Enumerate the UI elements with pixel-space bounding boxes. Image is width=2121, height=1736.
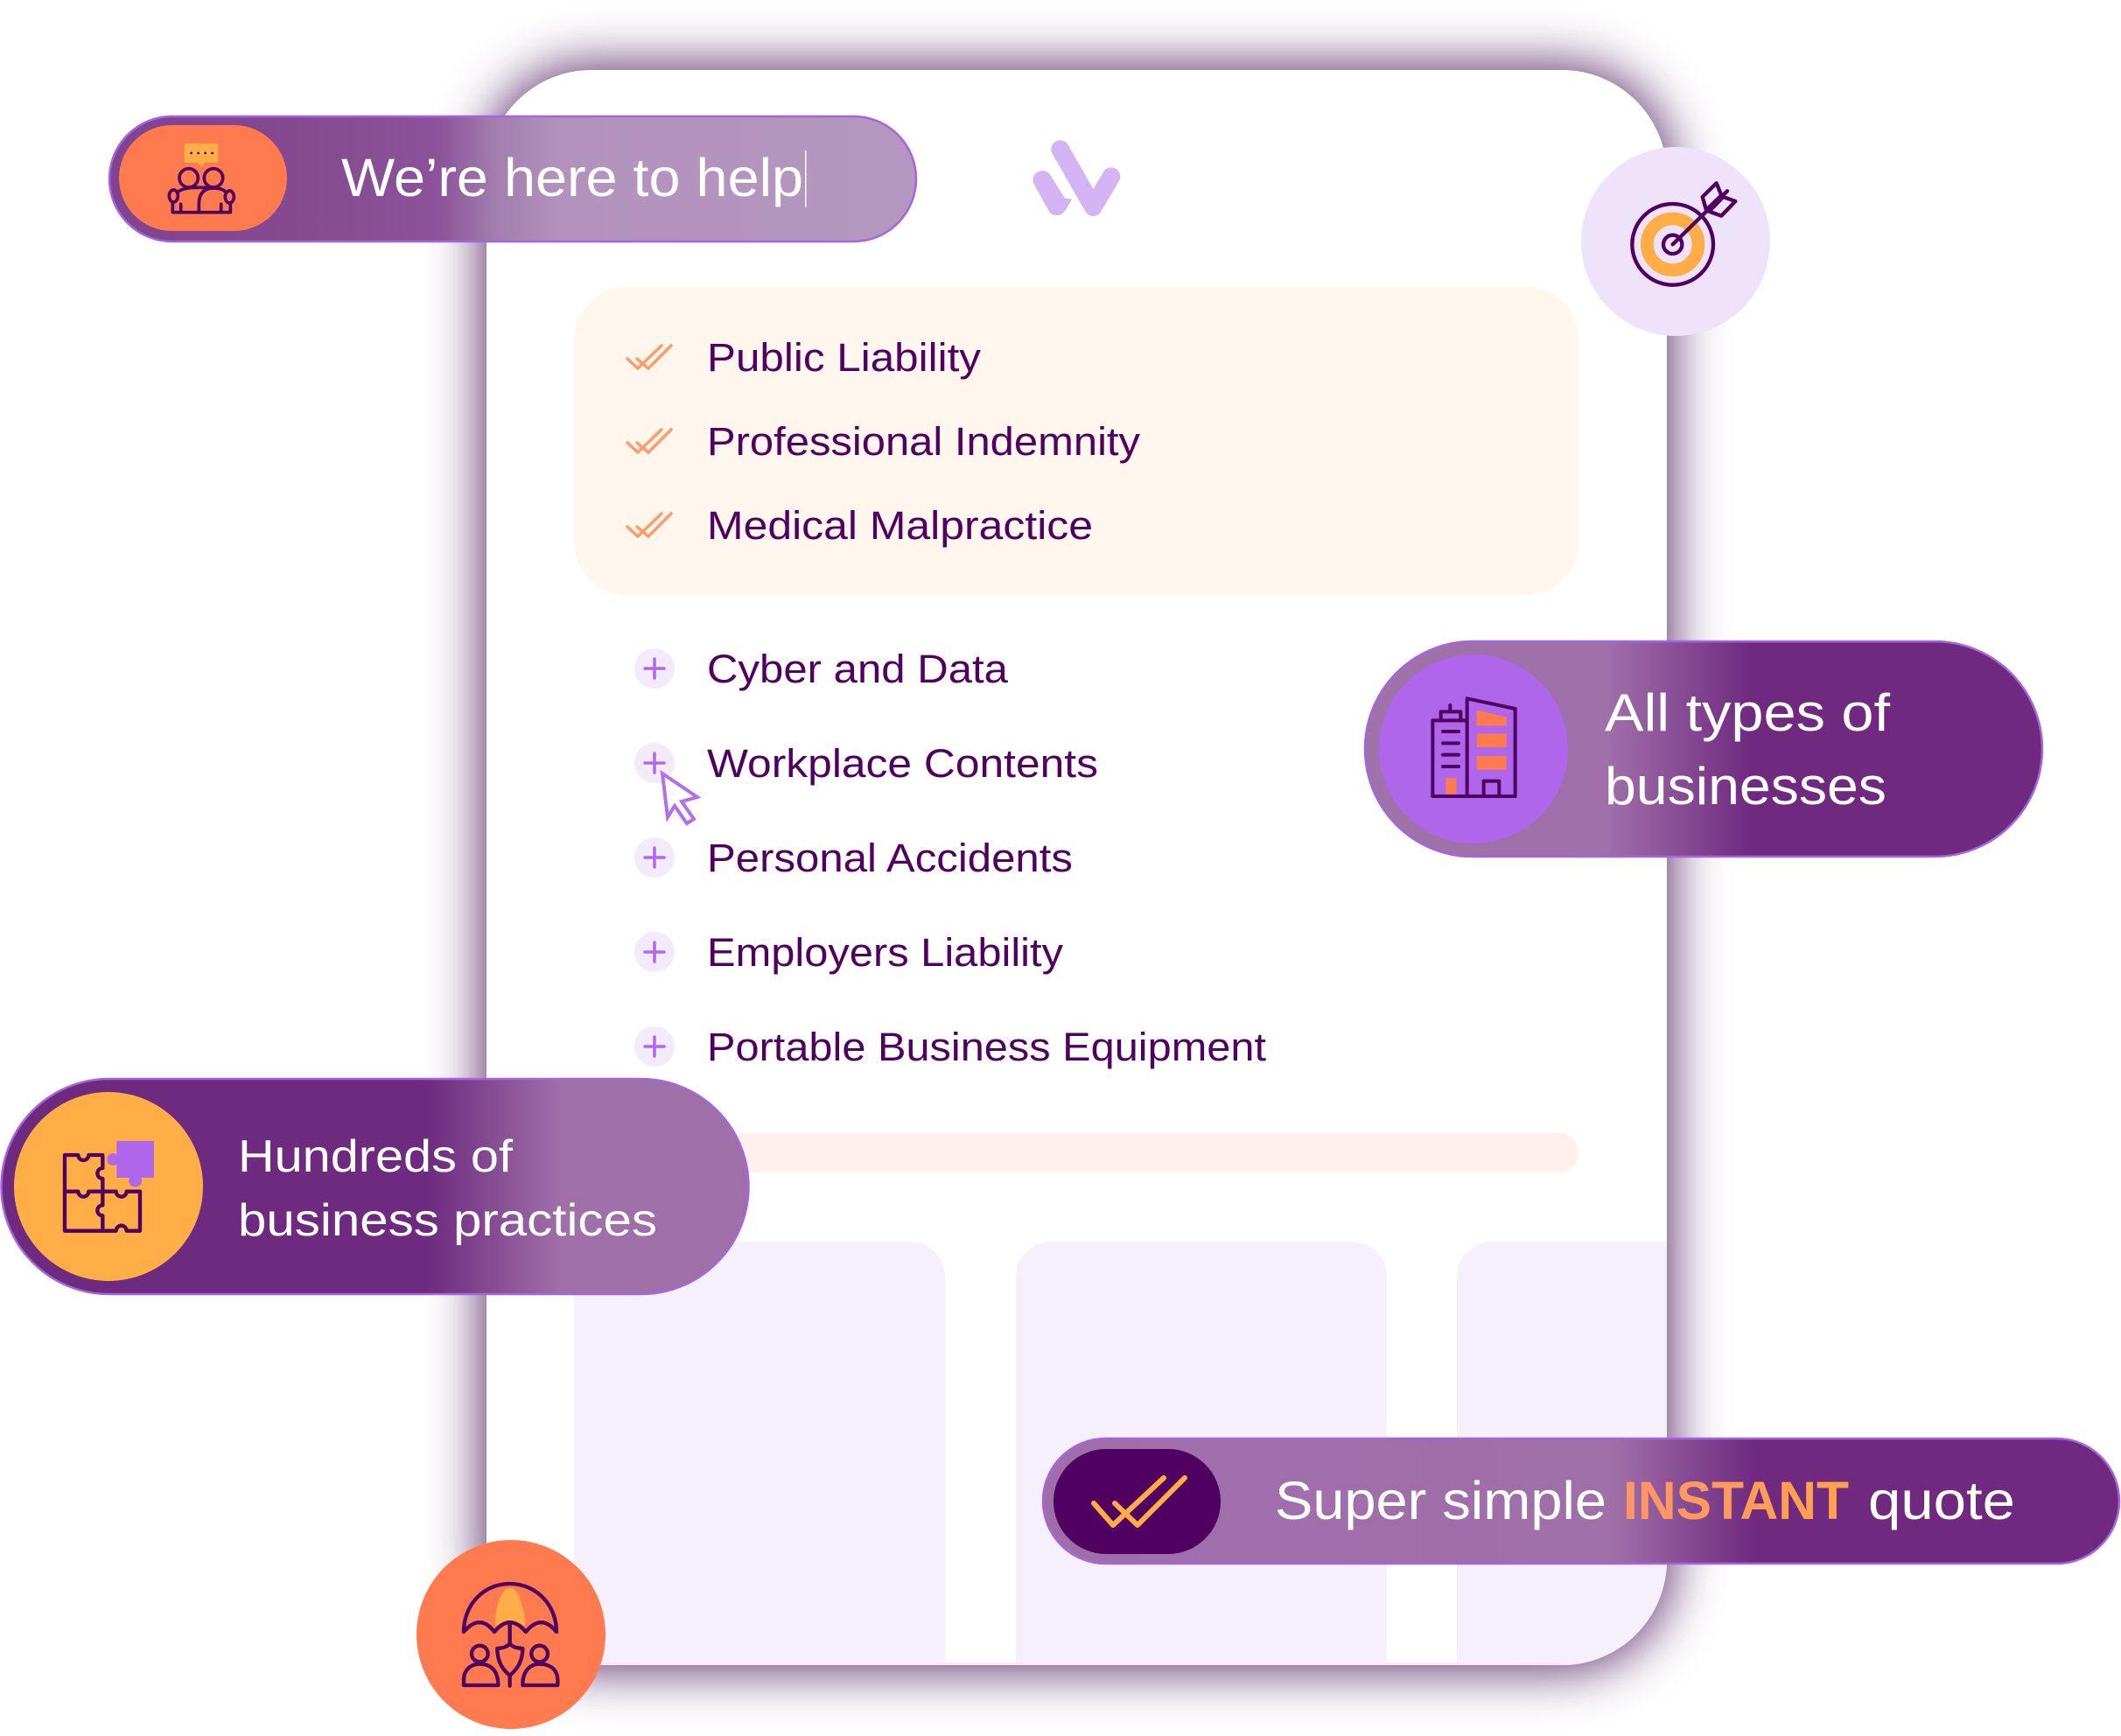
- icon: group with speech bubble: [169, 144, 234, 213]
- callout: Hundreds of business practices: Hundreds of: [238, 1131, 514, 1182]
- item: Professional Indemnity: Professional Indemnity: [707, 419, 1141, 464]
- item: Workplace Contents: Workplace Contents: [707, 741, 1098, 786]
- item: Cyber and Data: Cyber and Data: [707, 647, 1009, 691]
- callout: All types of businesses: businesses: [1605, 757, 1886, 816]
- item: Personal Accidents: Personal Accidents: [707, 836, 1073, 880]
- icon: umbrella protecting people: [464, 1584, 557, 1686]
- callout: We're here to help: We’re here to help: [341, 148, 803, 207]
- icon: puzzle pieces: [65, 1141, 154, 1231]
- item: Public Liability: Public Liability: [707, 335, 982, 380]
- panel: main card with shadow: [486, 70, 1667, 1665]
- callout: Super simple INSTANT quote: quote: [1868, 1471, 2015, 1530]
- callout: Super simple INSTANT quote: Super simple: [1275, 1471, 1606, 1530]
- callout: Hundreds of business practices: business practices: [238, 1195, 657, 1246]
- progress bar: [574, 1133, 1578, 1172]
- placeholder cards: [574, 1242, 1667, 1665]
- icon: double check: [1094, 1478, 1185, 1525]
- icon: buildings: [1432, 698, 1516, 796]
- callout: All types of businesses: All types of: [1605, 683, 1890, 742]
- callout: Super simple INSTANT quote: [1043, 1438, 2119, 1564]
- callout: We're here to help: [109, 116, 916, 242]
- callout: All types of businesses: [1365, 641, 2042, 857]
- logo: [1033, 150, 1111, 215]
- list: optional cover: [634, 647, 1267, 1069]
- icon: target with arrow: [1632, 183, 1735, 285]
- icon: mouse cursor: [662, 774, 697, 823]
- item: Medical Malpractice: Medical Malpractice: [707, 503, 1093, 548]
- badge: target: [1581, 147, 1770, 336]
- callout: Hundreds of business practices: [2, 1079, 749, 1294]
- item: Portable Business Equipment: Portable Business Equipment: [707, 1025, 1267, 1069]
- item: Employers Liability: Employers Liability: [707, 930, 1064, 975]
- badge: umbrella: [416, 1540, 606, 1729]
- panel: core cover list: [574, 287, 1578, 595]
- callout: Super simple INSTANT quote: INSTANT: [1623, 1471, 1849, 1530]
